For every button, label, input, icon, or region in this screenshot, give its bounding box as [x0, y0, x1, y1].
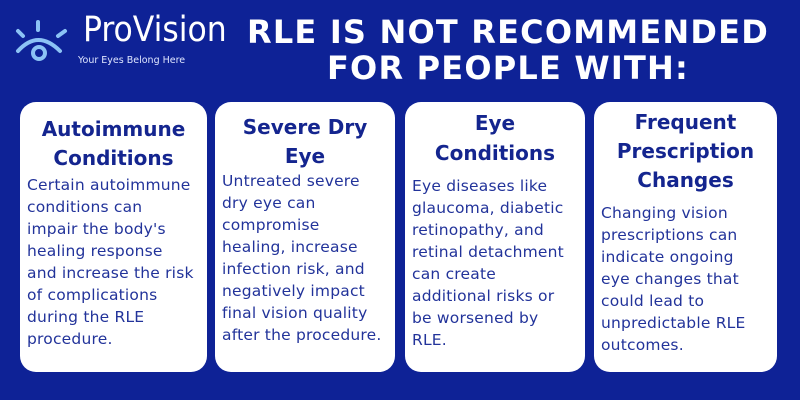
panel: autoimmune: and increase the risk	[27, 264, 194, 282]
panel: eye conditions: Eye diseases like	[412, 177, 547, 195]
panel: eye conditions: additional risks or	[412, 287, 554, 305]
panel: prescription: eye changes that	[601, 270, 739, 288]
panel: eye conditions: can create	[412, 265, 496, 283]
panel: prescription: Changes	[637, 168, 734, 192]
panel: eye conditions: Conditions	[435, 141, 555, 165]
panel: autoimmune: Certain autoimmune	[27, 176, 191, 194]
panel: eye conditions: retinopathy, and	[412, 221, 544, 239]
panel: autoimmune	[20, 102, 207, 372]
panel: autoimmune: conditions can	[27, 198, 142, 216]
panel: prescription: prescriptions can	[601, 226, 737, 244]
panel: eye conditions: be worsened by	[412, 309, 538, 327]
panel: prescription: outcomes.	[601, 336, 684, 354]
panel: autoimmune: of complications	[27, 286, 157, 304]
panel: autoimmune: Autoimmune	[42, 117, 185, 141]
panel: autoimmune: during the RLE	[27, 308, 144, 326]
panel: dry eye: Severe Dry	[243, 115, 367, 139]
panel: prescription: could lead to	[601, 292, 704, 310]
logo	[16, 10, 227, 66]
panel: autoimmune: procedure.	[27, 330, 113, 348]
title	[247, 13, 769, 87]
brand name: ProVision	[83, 10, 227, 50]
panel: eye conditions	[405, 102, 585, 372]
panel: prescription: unpredictable RLE	[601, 314, 746, 332]
title: FOR PEOPLE WITH:	[327, 49, 689, 87]
panel: dry eye: healing, increase	[222, 238, 358, 256]
icon: eye	[16, 20, 68, 61]
panel: dry eye: after the procedure.	[222, 326, 382, 344]
panel: dry eye: infection risk, and	[222, 260, 365, 278]
panel: prescription: Prescription	[617, 139, 754, 163]
panel: eye conditions: RLE.	[412, 331, 447, 349]
tagline: Your Eyes Belong Here	[78, 55, 185, 66]
panel: eye conditions: retinal detachment	[412, 243, 564, 261]
title: RLE IS NOT RECOMMENDED	[247, 13, 769, 51]
panel: prescription	[594, 102, 777, 372]
panel: dry eye: Eye	[285, 144, 325, 168]
panel: eye conditions: Eye	[475, 111, 515, 135]
panel: eye conditions: glaucoma, diabetic	[412, 199, 563, 217]
panel: dry eye: compromise	[222, 216, 319, 234]
panel: dry eye: Untreated severe	[222, 172, 360, 190]
panel: prescription: indicate ongoing	[601, 248, 734, 266]
panel: dry eye: dry eye can	[222, 194, 316, 212]
panel: autoimmune: healing response	[27, 242, 163, 260]
panel: prescription: Frequent	[635, 110, 736, 134]
panel: dry eye: negatively impact	[222, 282, 365, 300]
panel: dry eye: final vision quality	[222, 304, 367, 322]
panel: autoimmune: impair the body's	[27, 220, 166, 238]
panel: autoimmune: Conditions	[53, 146, 174, 170]
panel: dry eye	[215, 102, 395, 372]
panel: prescription: Changing vision	[601, 204, 728, 222]
